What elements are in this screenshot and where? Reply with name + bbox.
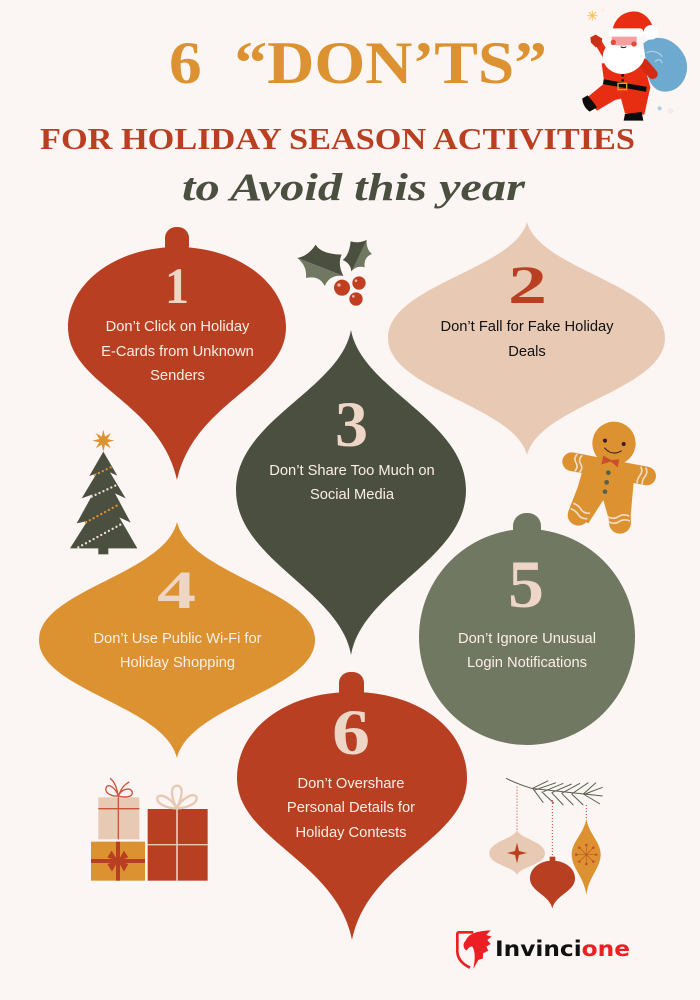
ornament 3: social media xyxy=(236,330,466,655)
body xyxy=(388,222,665,455)
ornament 1: holiday e-cards xyxy=(68,227,286,480)
ornament 2: fake deals xyxy=(388,222,665,455)
cap xyxy=(339,672,364,704)
number: 6 xyxy=(332,697,370,769)
text: Holiday Contests xyxy=(295,825,407,841)
text: Deals xyxy=(508,344,546,360)
subheading: to avoid this year: to Avoid this year xyxy=(182,166,526,209)
subheading: for holiday season activities: FOR HOLIDAY SEASON ACTIVITIES xyxy=(40,121,635,156)
body xyxy=(68,247,286,480)
icon: hanging ornaments xyxy=(489,778,603,909)
text: Login Notifications xyxy=(467,655,587,671)
number: 4 xyxy=(157,560,196,620)
text: Don’t Fall for Fake Holiday xyxy=(440,319,614,335)
number: 2 xyxy=(508,255,547,315)
text: Personal Details for xyxy=(287,800,415,816)
number: 3 xyxy=(335,389,368,461)
text: Don’t Overshare xyxy=(298,776,404,792)
title xyxy=(40,30,635,209)
ornament 5: login notifications xyxy=(419,513,635,745)
body xyxy=(236,330,466,655)
icon: santa with sack xyxy=(582,8,687,121)
wordmark: Invinci one xyxy=(495,937,630,961)
text: Senders xyxy=(150,368,205,384)
text: Don’t Ignore Unusual xyxy=(458,631,596,647)
icon: christmas tree xyxy=(70,430,137,554)
text: Social Media xyxy=(310,487,395,503)
ornament 6: personal details xyxy=(237,672,467,940)
ornament 4: public wi-fi xyxy=(39,522,315,758)
cap xyxy=(165,227,189,257)
text: Holiday Shopping xyxy=(120,655,235,671)
number: 1 xyxy=(165,259,189,315)
text: Don’t Use Public Wi-Fi for xyxy=(93,631,262,647)
body xyxy=(39,522,315,758)
text: Don’t Share Too Much on xyxy=(269,463,435,479)
icon: gingerbread man xyxy=(570,422,647,523)
body xyxy=(237,692,467,940)
text: Don’t Click on Holiday xyxy=(106,319,250,335)
icon: shield with eagle xyxy=(457,930,492,969)
logo: invincione xyxy=(457,930,630,969)
cap xyxy=(513,513,541,545)
icon: holly xyxy=(297,240,372,306)
body xyxy=(419,529,635,745)
icon: gift boxes xyxy=(91,778,208,881)
text: E-Cards from Unknown xyxy=(101,344,254,360)
heading: 6 DON'TS: 6 “DON’TS” xyxy=(169,30,547,96)
number: 5 xyxy=(508,546,544,622)
